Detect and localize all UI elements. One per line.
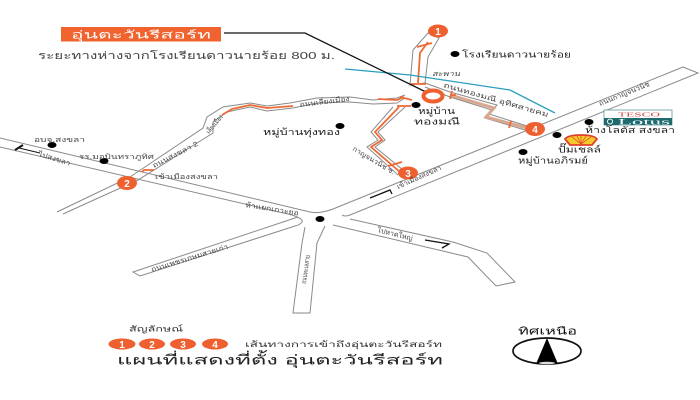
legend text: เส้นทางการเข้าถึงอุ่นตะวันรีสอร์ท — [245, 339, 442, 349]
legend heading: สัญลักษณ์ — [129, 324, 184, 334]
label: Aphirom village: หมู่บ้านอภิรมย์ — [518, 154, 588, 166]
marker 4 — [525, 122, 545, 136]
road label: to Songkhla city: เข้าเมืองสงขลา — [396, 164, 443, 191]
landmark labels — [34, 50, 675, 181]
left road: lower edge — [0, 147, 302, 276]
direction arrows — [15, 145, 449, 248]
arrow: left road — [15, 145, 23, 150]
road to marker 4 edges — [425, 83, 527, 130]
road label: Thong Mani road: ถนนทองมณี อุทิศสายคม — [442, 81, 549, 119]
legend marker 2 — [139, 338, 165, 351]
logo: Tesco Lotus — [604, 110, 672, 126]
orange route lines — [142, 42, 527, 172]
legend marker 4: 4 — [212, 340, 218, 351]
route 4 arrow ticks — [450, 91, 511, 128]
river — [345, 69, 555, 113]
legend marker 3 — [170, 338, 196, 351]
landmark dots — [48, 51, 594, 222]
legend marker 1: 1 — [119, 340, 125, 351]
label: Thong Mani village line 1: หมู่บ้าน — [418, 106, 455, 117]
legend — [108, 324, 442, 351]
road to marker 1 — [410, 33, 439, 85]
south road — [293, 226, 325, 313]
main road: upper right to junction — [0, 67, 698, 216]
road label: five-way junction: ห้าแยกเกาะยอ — [245, 201, 299, 217]
road label: Phetkasem: ถนนเพชรเกษมสายเก่า — [151, 244, 229, 274]
arrow: left road shaft — [19, 148, 40, 153]
road label: south road: ถนนทะเลสาบ — [301, 255, 312, 284]
label: provincial office: อบจ.สงขลา — [34, 137, 85, 144]
legend marker 4 — [202, 338, 228, 351]
arrow: main road — [370, 190, 392, 198]
marker 4: 4 — [532, 125, 538, 136]
road label: lane 2: กาญจนวนิช ซ. — [351, 145, 396, 176]
logo: Shell — [565, 135, 597, 145]
route 4 — [450, 95, 527, 128]
label: school 2: รร.มอบินทราภูทิศ — [79, 153, 155, 161]
label: bridge: สะพาน — [432, 71, 460, 78]
legend marker 3: 3 — [180, 340, 186, 351]
label: school: โรงเรียนดาวนายร้อย — [462, 50, 571, 60]
road label: to Hat Yai: ไปหาดใหญ่ — [376, 225, 414, 243]
marker 2: 2 — [124, 179, 130, 190]
map title: แผนที่แสดงที่ตั้ง อุ่นตะวันรีสอร์ท — [117, 350, 443, 368]
label: Lotus store: ห้างโลตัส สงขลา — [585, 125, 675, 135]
road label: curved road lower: ถนนสงขลา 2 — [152, 141, 200, 170]
road label: Kanchanawanit: ถนนกาญจนวนิช — [598, 80, 651, 108]
marker 1 — [428, 24, 448, 38]
curved road to marker 2 — [57, 95, 405, 214]
legend marker 1 — [108, 338, 136, 351]
route 2 — [142, 97, 412, 172]
logo: Tesco Lotus: Lotus — [618, 118, 670, 126]
marker 3: 3 — [405, 169, 411, 180]
road label: curved road upper: เลี่ยงเมือง — [204, 113, 225, 135]
label: Shell station: ปั๊มเชลล์ — [558, 142, 601, 154]
southeast road — [333, 219, 515, 286]
north compass — [513, 326, 581, 364]
logo: Tesco Lotus: TESCO — [618, 112, 661, 118]
arrow: southeast road — [425, 240, 449, 248]
marker 3 — [398, 166, 418, 180]
road label: to Songkhla: ไปสงขลา — [36, 149, 72, 168]
label: to Songkhla: เข้าเมืองสงขลา — [155, 173, 218, 181]
marker 2 — [117, 176, 137, 190]
leader line from title to resort — [224, 33, 428, 93]
resort name banner: อุ่นตะวันรีสอร์ท — [71, 28, 211, 42]
route 3 — [371, 106, 411, 172]
road network — [0, 33, 698, 313]
label: Thung Thong village: หมู่บ้านทุ่งทอง — [263, 127, 340, 138]
resort marker — [424, 90, 442, 102]
legend marker 2: 2 — [149, 340, 155, 351]
resort name banner — [61, 27, 221, 42]
north label: ทิศเหนือ — [518, 326, 577, 338]
route 1 — [411, 42, 432, 84]
road labels — [36, 80, 651, 284]
label: Thong Mani village line 2: ทองมณี — [414, 116, 460, 126]
road to marker 3 — [367, 107, 405, 175]
distance text: ระยะทางห่างจากโรงเรียนดาวนายร้อย 800 ม. — [38, 49, 335, 62]
road label: bypass: ถนนเลี่ยงเมือง — [299, 94, 350, 109]
marker 1: 1 — [435, 27, 441, 38]
